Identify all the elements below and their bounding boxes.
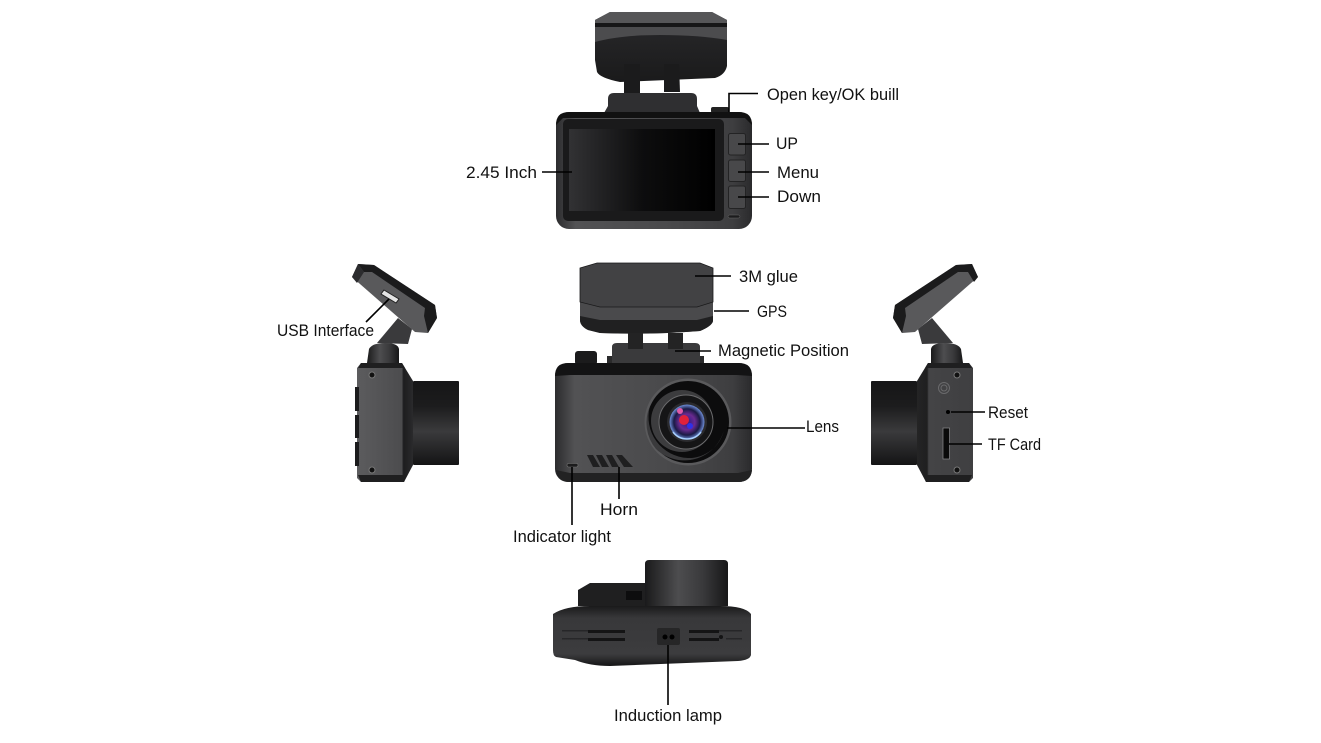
body	[556, 112, 752, 229]
right speaker vents	[689, 630, 742, 641]
neck	[931, 343, 963, 363]
small slot	[728, 215, 740, 218]
callout: up	[738, 134, 798, 153]
adhesive mount, lower band	[580, 300, 713, 334]
callout: 3M glue	[695, 267, 798, 286]
callout: reset: Reset	[988, 403, 1028, 422]
callouts: lens view	[513, 267, 849, 546]
body	[553, 606, 751, 666]
callout: horn: Horn	[600, 500, 638, 519]
rear mount stub	[578, 583, 645, 606]
lens barrel	[645, 560, 728, 606]
screen bezel	[563, 119, 724, 221]
callout: induction lamp	[614, 645, 722, 725]
body	[555, 363, 752, 482]
screws	[369, 372, 375, 473]
magnetic base	[612, 343, 700, 364]
side nubs	[607, 356, 612, 364]
callout: magnetic position: Magnetic Position	[718, 341, 849, 360]
adhesive mount	[893, 264, 978, 333]
callout: 3M glue: 3M glue	[739, 267, 798, 286]
callout: open key	[729, 85, 899, 112]
round mark	[938, 382, 950, 394]
device: front view with screen	[556, 12, 752, 229]
mount arm	[918, 318, 953, 344]
open key button	[711, 107, 729, 113]
mount arms	[628, 333, 683, 349]
mount arm	[377, 318, 412, 344]
callout: up: UP	[776, 134, 798, 153]
screws	[954, 372, 960, 473]
device: bottom view	[553, 560, 751, 666]
callout: screen size	[466, 163, 572, 182]
left speaker vents	[562, 630, 625, 641]
callout: lens: Lens	[806, 417, 839, 436]
adhesive mount, rear	[595, 12, 727, 82]
indicator light	[567, 464, 578, 467]
screen	[569, 129, 715, 211]
callout: USB interface: USB Interface	[277, 321, 374, 340]
callout: induction lamp: Induction lamp	[614, 706, 722, 725]
USB port	[381, 290, 399, 303]
adhesive pad, 3M glue	[580, 263, 713, 307]
button ridges	[355, 387, 359, 466]
body end caps	[358, 363, 407, 482]
callout: lens	[727, 417, 839, 436]
callout: indicator light: Indicator light	[513, 527, 611, 546]
callout: screen size: 2.45 Inch	[466, 163, 537, 182]
adhesive mount	[352, 264, 437, 333]
neck	[367, 343, 399, 363]
callout: menu: Menu	[777, 163, 819, 182]
callout: down	[738, 187, 821, 206]
TF card slot	[943, 428, 950, 459]
horn grille	[587, 455, 633, 467]
top button	[575, 351, 597, 365]
callout: TF card: TF Card	[988, 435, 1041, 454]
device: left side view	[352, 264, 459, 482]
body end caps	[923, 363, 972, 482]
callout: open key: Open key/OK buill	[767, 85, 899, 104]
device: right side view	[871, 264, 978, 482]
magnetic base	[604, 93, 700, 113]
lens barrel	[413, 381, 459, 465]
callout: menu	[738, 163, 819, 182]
callout: horn	[600, 467, 638, 519]
device: lens view	[555, 263, 752, 482]
callout: USB interface	[277, 299, 389, 340]
callout: GPS	[714, 302, 787, 321]
reset hole	[946, 410, 950, 414]
body	[917, 363, 973, 482]
callouts: front view	[466, 85, 899, 206]
callouts: right side view	[949, 403, 1041, 454]
body	[357, 363, 413, 482]
lens assembly	[644, 378, 732, 466]
induction lamp window	[657, 628, 680, 645]
callout: down: Down	[777, 187, 821, 206]
mount arms	[624, 64, 680, 94]
callout: GPS: GPS	[757, 302, 787, 321]
lens barrel	[871, 381, 917, 465]
callout: indicator light	[513, 467, 611, 546]
buttons	[728, 134, 746, 208]
